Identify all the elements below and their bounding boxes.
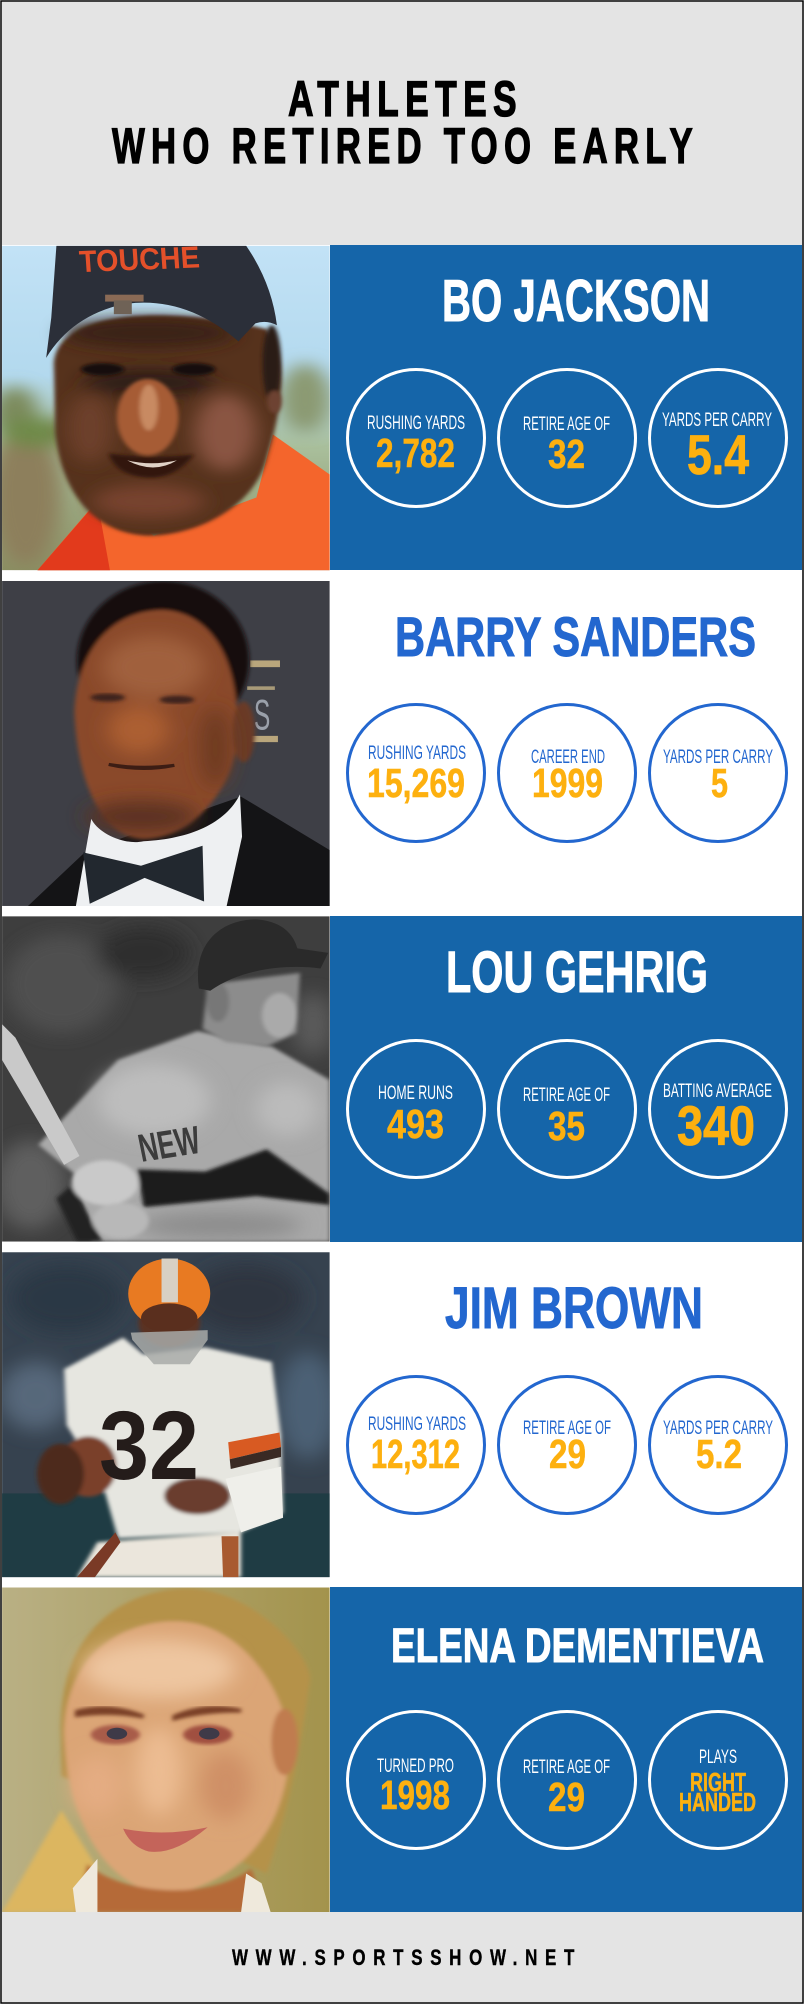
stat: plays right handed: HANDED <box>679 1787 756 1817</box>
stat: turned pro: TURNED PRO <box>377 1756 454 1777</box>
stat: retire age: RETIRE AGE OF <box>523 1085 610 1106</box>
panel: Jim Brown <box>0 1252 786 1577</box>
stat: yards per carry: 5 <box>711 760 728 806</box>
photo: Lou Gehrig: NEW <box>134 1118 204 1170</box>
stat: rushing yards: 2,782 <box>376 430 455 476</box>
stat: rushing yards <box>348 704 484 842</box>
panel: Elena Dementieva <box>2 1587 802 1912</box>
stat: rushing yards: RUSHING YARDS <box>367 413 465 434</box>
photo: Bo Jackson <box>0 240 331 572</box>
name: Lou Gehrig: LOU GEHRIG <box>446 940 708 1005</box>
stat: retire age <box>498 1040 636 1178</box>
stat: yards per carry <box>650 1376 786 1514</box>
stat: retire age: 32 <box>548 431 585 477</box>
stat: home runs: HOME RUNS <box>378 1083 453 1104</box>
panel: Lou Gehrig <box>0 916 802 1242</box>
stat: rushing yards: RUSHING YARDS <box>368 1414 466 1435</box>
stat: rushing yards: 12,312 <box>371 1431 460 1477</box>
stat: rushing yards: 15,269 <box>367 760 465 806</box>
stat: batting average: 340 <box>677 1094 755 1157</box>
stat: retire age: RETIRE AGE OF <box>523 1418 611 1439</box>
photo: Barry Sanders <box>2 581 330 908</box>
stat: career end: 1999 <box>532 760 603 806</box>
stat: rushing yards <box>348 1376 484 1514</box>
stat: plays right handed: RIGHT <box>690 1767 746 1797</box>
stat: retire age <box>498 1712 636 1848</box>
stat: yards per carry <box>650 370 786 506</box>
stat: rushing yards <box>348 370 484 506</box>
panel: footer <box>2 1912 802 2002</box>
stat: plays right handed <box>650 1712 786 1848</box>
title: ATHLETES <box>288 71 523 127</box>
stat: batting average <box>650 1040 786 1178</box>
panel: Bo Jackson <box>0 240 802 572</box>
jersey number: 32 <box>99 1391 199 1500</box>
title <box>112 71 699 174</box>
stat: retire age: 29 <box>549 1431 586 1477</box>
stat: retire age <box>498 1376 636 1514</box>
stat: home runs <box>348 1040 484 1178</box>
stat: retire age: 35 <box>548 1103 585 1149</box>
name: Jim Brown: JIM BROWN <box>445 1276 703 1341</box>
photo: Lou Gehrig <box>0 916 333 1242</box>
stat: yards per carry: 5.4 <box>687 423 749 486</box>
stat: plays right handed: PLAYS <box>699 1747 737 1768</box>
stat: retire age: RETIRE AGE OF <box>523 1757 610 1778</box>
stat: yards per carry <box>650 704 786 842</box>
stat: retire age <box>498 370 636 506</box>
photo: Jim Brown <box>0 1252 338 1577</box>
stat: turned pro: 1998 <box>380 1772 450 1818</box>
stat: career end: CAREER END <box>531 747 605 768</box>
photo: Barry Sanders: S <box>254 692 270 739</box>
stat: career end <box>498 704 636 842</box>
cap lettering: TOUCHE <box>78 240 201 279</box>
photo: Elena Dementieva <box>2 1587 330 1912</box>
stat: turned pro <box>348 1712 484 1848</box>
stat: retire age: 29 <box>548 1774 585 1820</box>
footer url: WWW.SPORTSSHOW.NET <box>232 1945 582 1970</box>
stat: rushing yards: RUSHING YARDS <box>368 743 466 764</box>
panel: Barry Sanders <box>2 581 786 908</box>
stat: yards per carry: 5.2 <box>696 1431 742 1477</box>
stat: retire age: RETIRE AGE OF <box>523 414 610 435</box>
stat: home runs: 493 <box>387 1101 444 1147</box>
panel: header <box>2 2 802 245</box>
